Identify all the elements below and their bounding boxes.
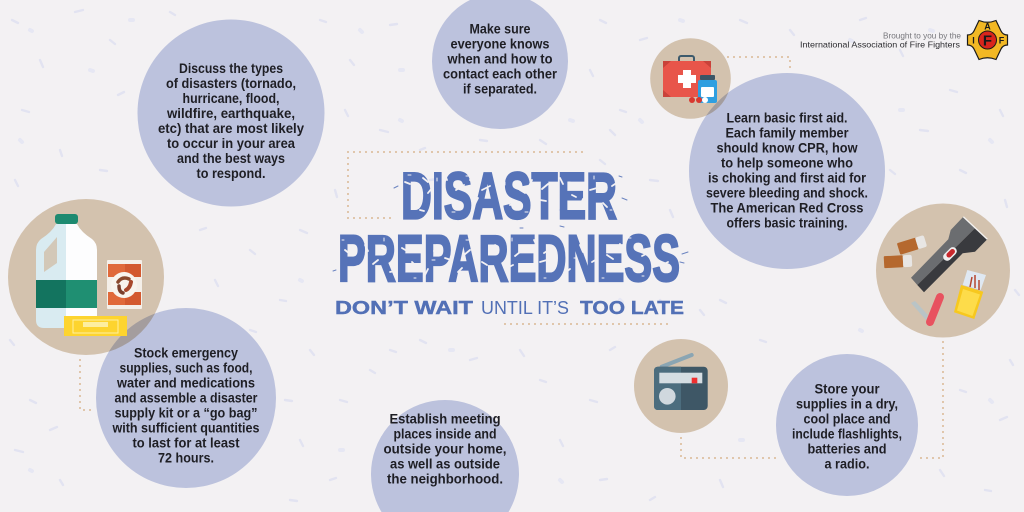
- panel: discuss disasters: Discuss the types: [179, 61, 283, 76]
- icon: pocket knife: [911, 297, 940, 322]
- panel: first aid: to help someone who: [721, 156, 853, 170]
- panel: first aid: [689, 73, 885, 269]
- panel: emergency supplies: and assemble a disaster: [114, 391, 258, 406]
- credit text: International Association of Fire Fighters: [800, 40, 960, 50]
- panel: emergency supplies: to last for at least: [132, 436, 240, 451]
- panel: emergency supplies: Stock emergency: [134, 346, 239, 361]
- panel: store supplies: batteries and: [808, 442, 886, 456]
- panel: emergency supplies: water and medications: [116, 376, 255, 391]
- panel: first aid: offers basic training.: [726, 216, 848, 230]
- logo: IAFF emblem: F: [999, 36, 1005, 46]
- panel: contact plan: contact each other: [443, 66, 558, 82]
- panel: discuss disasters: and the best ways: [177, 151, 285, 166]
- icon: water jug: [36, 214, 97, 328]
- subtitle: too late: TOO LATE: [580, 298, 684, 318]
- subtitle: don't wait: DON’T WAIT: [335, 298, 473, 318]
- panel: first aid: Each family member: [726, 126, 849, 140]
- logo: IAFF emblem: I: [972, 36, 975, 46]
- panel: contact plan: when and how to: [447, 52, 552, 66]
- panel: discuss disasters: etc) that are most likely: [158, 121, 305, 136]
- icon: medicine bottle and pills: [689, 75, 717, 103]
- panel: emergency supplies: [96, 308, 276, 488]
- panel: first aid: should know CPR, how: [716, 140, 858, 156]
- icon backdrop: supplies circle: [8, 199, 164, 355]
- panel: store supplies: supplies in a dry,: [796, 396, 898, 412]
- panel: contact plan: Make sure: [470, 22, 530, 36]
- panel: first aid: Learn basic first aid.: [726, 111, 848, 126]
- panel: discuss disasters: wildfire, earthquake,: [166, 106, 295, 121]
- icon: matchbox: [954, 270, 986, 319]
- panel: discuss disasters: to respond.: [196, 166, 266, 181]
- panel: first aid: The American Red Cross: [710, 200, 864, 216]
- panel: store supplies: [776, 354, 918, 496]
- panel: contact plan: [432, 0, 568, 129]
- title line: disaster: DISASTER: [401, 158, 617, 232]
- icon backdrop: flashlight circle: [876, 204, 1010, 338]
- panel: contact plan: if separated.: [463, 82, 537, 96]
- icon: radio: [654, 355, 708, 410]
- credit text: [800, 30, 961, 50]
- panel: discuss disasters: of disasters (tornado,: [166, 76, 296, 91]
- panel: emergency supplies: 72 hours.: [158, 451, 214, 466]
- panel: emergency supplies: supplies, such as food,: [120, 361, 252, 376]
- panel: contact plan: everyone knows: [450, 36, 550, 52]
- panel: discuss disasters: [138, 20, 324, 206]
- icon backdrop: radio circle: [634, 339, 728, 433]
- panel: meeting places: outside your home,: [384, 442, 506, 456]
- credit text: Brought to you by the: [883, 30, 961, 40]
- panel: first aid: severe bleeding and shock.: [706, 186, 868, 200]
- panel: meeting places: the neighborhood.: [387, 472, 503, 486]
- logo: IAFF emblem: A: [984, 22, 991, 32]
- icon: batteries: [884, 235, 927, 268]
- panel: discuss disasters: to occur in your area: [167, 136, 296, 151]
- title: [333, 158, 688, 295]
- subtitle: until it's: UNTIL IT’S: [481, 298, 569, 318]
- icon: can of beans: [107, 260, 142, 309]
- panel: emergency supplies: supply kit or a “go bag”: [114, 406, 258, 421]
- logo: IAFF emblem: F: [983, 32, 992, 50]
- panel: store supplies: a radio.: [824, 456, 870, 472]
- icon backdrop: first aid circle: [650, 38, 731, 119]
- panel: first aid: is choking and first aid for: [708, 170, 867, 186]
- panel: store supplies: include flashlights,: [792, 426, 902, 442]
- icon: flashlight: [911, 217, 987, 292]
- panel: meeting places: as well as outside: [390, 456, 500, 472]
- panel: store supplies: Store your: [814, 382, 880, 396]
- icon: first aid kit: [663, 56, 711, 97]
- panel: meeting places: Establish meeting: [390, 412, 500, 426]
- panel: meeting places: places inside and: [394, 426, 496, 442]
- panel: emergency supplies: with sufficient quantities: [112, 421, 260, 436]
- title line: preparedness: PREPAREDNESS: [338, 221, 680, 295]
- icon: yellow ration bar: [64, 316, 127, 336]
- logo: IAFF emblem: [968, 20, 1008, 60]
- panel: store supplies: cool place and: [804, 412, 890, 426]
- subtitle: [335, 298, 684, 318]
- panel: discuss disasters: hurricane, flood,: [182, 91, 280, 106]
- panel: meeting places: [371, 400, 519, 512]
